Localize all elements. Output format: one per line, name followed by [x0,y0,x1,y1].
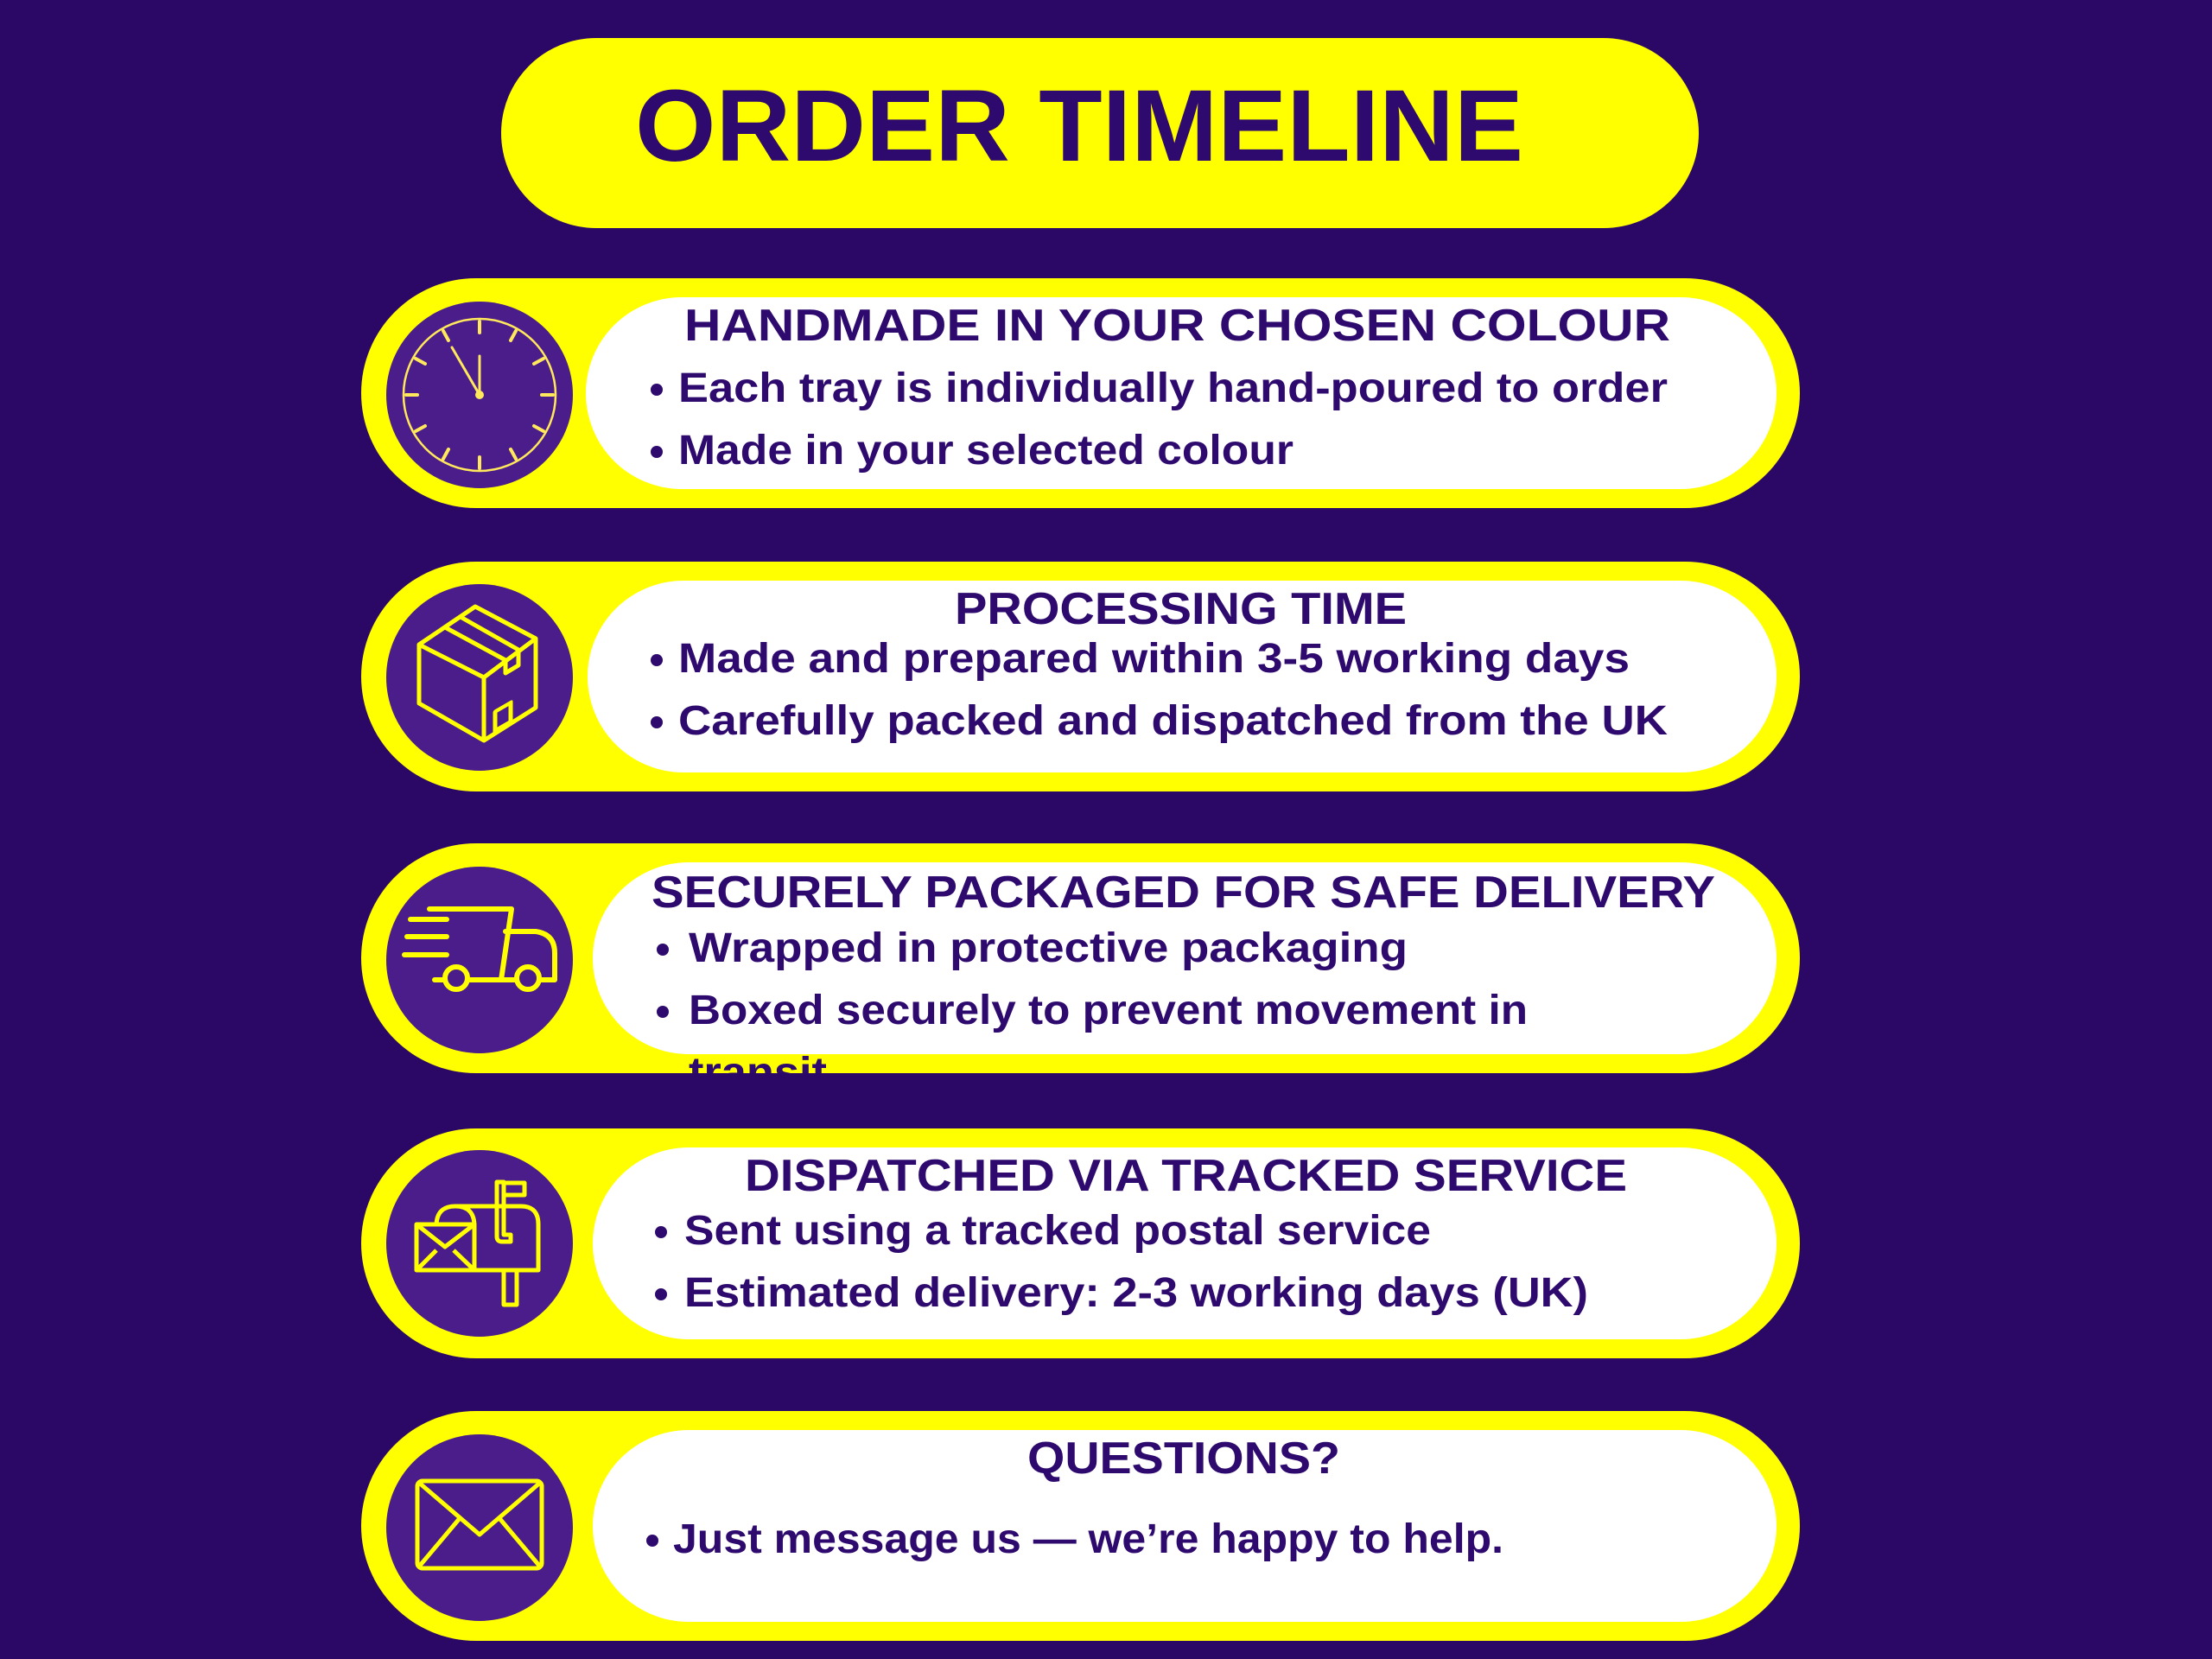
bullets: Wrapped in protective packaging [689,925,1408,971]
bullets [657,931,1525,1073]
bullets: Each tray is individually hand-poured to order [678,365,1668,411]
bullets: Sent using a tracked postal service [684,1208,1431,1254]
heading: PROCESSING TIME [955,584,1407,634]
bullets: Estimated delivery: 2-3 working days (UK) [684,1270,1588,1316]
icon: envelope [386,1434,573,1621]
heading: HANDMADE IN YOUR CHOSEN COLOUR [684,301,1670,351]
heading: DISPATCHED VIA TRACKED SERVICE [745,1151,1627,1201]
bullets: transit [689,1050,827,1096]
title [501,38,1699,228]
bullets: Boxed securely to prevent movement in [689,988,1528,1033]
bullets [655,1208,1588,1316]
bullets: Carefully packed and dispatched from the UK [678,698,1668,744]
panel: questions [361,1411,1800,1641]
icon: clock [386,302,573,488]
panel: securely packaged [361,843,1800,1096]
heading: QUESTIONS? [1027,1433,1340,1484]
icon: truck [386,867,573,1053]
title: ORDER TIMELINE [635,69,1523,183]
icon: mailbox [386,1150,573,1337]
bullet: Just message us — we’re happy to help. [673,1516,1503,1562]
icon: box [386,584,573,771]
panel: dispatched [361,1128,1800,1358]
panel: handmade [361,278,1800,508]
bullets: Made in your selected colour [678,428,1294,474]
bullets [651,365,1668,474]
heading: SECURELY PACKAGED FOR SAFE DELIVERY [652,868,1715,918]
bullets: Made and prepared within 3-5 working days [678,636,1630,682]
panel: processing [361,562,1800,791]
bullets [651,636,1668,744]
